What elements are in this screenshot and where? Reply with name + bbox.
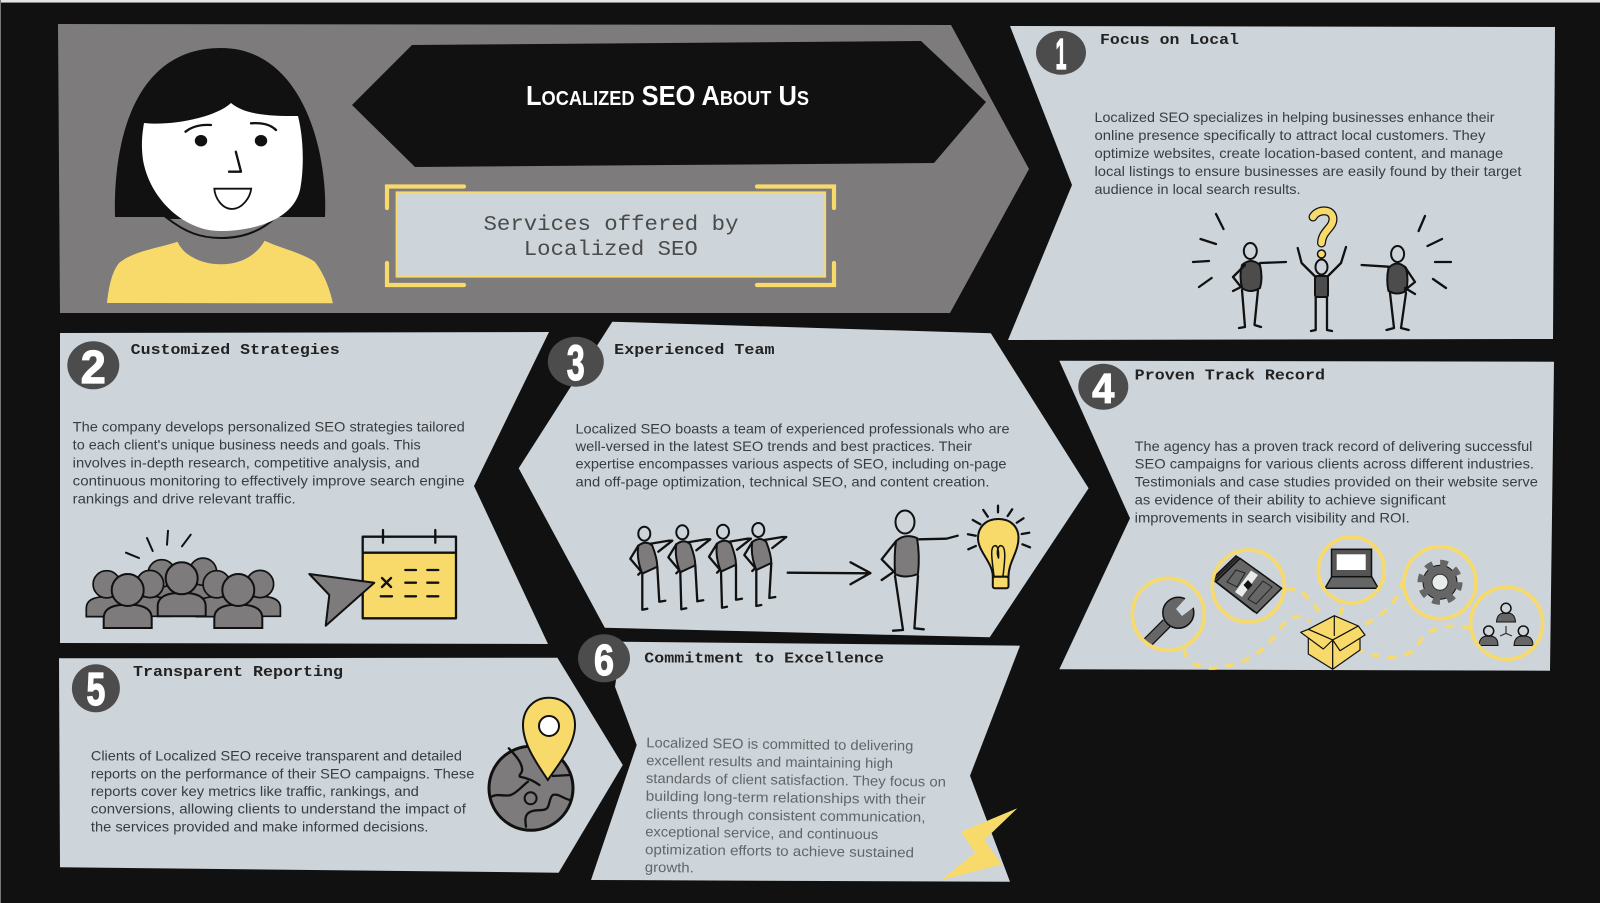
badge 5: 5 <box>86 663 105 715</box>
icon: wrench <box>1132 578 1204 650</box>
subtitle text: Localized SEO <box>524 239 698 262</box>
heading: Proven Track Record <box>1135 367 1325 384</box>
body text: online presence specifically to attract local customers. They <box>1094 127 1486 143</box>
icon: money stack <box>1212 550 1284 622</box>
body text: Localized SEO is committed to delivering <box>646 734 913 754</box>
panel shape <box>519 322 1089 637</box>
icon: people network <box>1471 587 1543 659</box>
body text: Clients of Localized SEO receive transparent and detailed <box>91 748 462 764</box>
avatar: woman with bob haircut <box>107 48 333 303</box>
body text: to each client's unique business needs and goals. This <box>73 436 421 452</box>
body text: audience in local search results. <box>1094 181 1300 197</box>
badge 1 <box>1036 30 1086 79</box>
body text: and off-page optimization, technical SEO, and content creation. <box>576 473 990 489</box>
panel shape <box>59 658 623 873</box>
body text: improvements in search visibility and ROI. <box>1135 510 1410 526</box>
heading: Experienced Team <box>614 342 774 359</box>
icon: lightning bolt <box>942 808 1017 880</box>
panel 4: Proven Track Record <box>1059 361 1554 671</box>
heading: Transparent Reporting <box>133 664 343 681</box>
badge 3 <box>548 335 604 391</box>
illustration: three figures and question mark <box>1193 211 1451 331</box>
panel 6: Commitment to Excellence <box>578 634 1020 882</box>
heading: Focus on Local <box>1100 32 1239 49</box>
body text: The agency has a proven track record of delivering successful <box>1135 438 1532 454</box>
body text: SEO campaigns for various clients across different industries. <box>1135 456 1534 472</box>
badge 3: 3 <box>567 335 585 391</box>
title banner <box>352 41 986 167</box>
arrow <box>788 562 870 584</box>
illustration: leader pointing <box>882 510 958 631</box>
icon: gear <box>1404 547 1476 619</box>
body text: exceptional service, and continuous <box>645 823 878 842</box>
icon: globe with location pin <box>489 698 575 830</box>
panel shape <box>60 332 549 644</box>
badge 2 <box>67 341 119 393</box>
illustration: four team members <box>630 523 786 610</box>
hero arrow background <box>58 24 1029 313</box>
body text: Testimonials and case studies provided on their website serve <box>1135 473 1538 489</box>
body text: optimize websites, create location-based content, and manage <box>1094 145 1503 161</box>
badge 6: 6 <box>594 636 614 685</box>
body text: as evidence of their ability to achieve significant <box>1135 492 1446 508</box>
body text: rankings and drive relevant traffic. <box>73 490 296 506</box>
panel 3: Experienced Team <box>519 322 1089 637</box>
icon: laptop <box>1318 537 1384 603</box>
body text: building long-term relationships with their <box>646 788 926 807</box>
body text: continuous monitoring to effectively improve search engine <box>73 473 465 489</box>
body text: well-versed in the latest SEO trends and best practices. Their <box>574 438 972 454</box>
panel: hero header <box>58 24 1029 313</box>
subtitle box with corner brackets <box>387 186 834 285</box>
icon: calendar with arrow <box>309 530 456 626</box>
badge 5 <box>72 663 120 715</box>
body text: clients through consistent communication, <box>645 805 926 825</box>
badge 6 <box>578 634 630 685</box>
body text: local listings to ensure businesses are easily found by their target <box>1094 163 1522 179</box>
panel shape <box>1008 26 1555 340</box>
badge 4: 4 <box>1092 365 1115 412</box>
badge 2: 2 <box>81 341 106 393</box>
body text: standards of client satisfaction. They focus on <box>646 770 946 790</box>
body text: involves in-depth research, competitive analysis, and <box>73 455 420 471</box>
panel shape <box>1059 361 1554 671</box>
title: Localized SEO About Us <box>526 80 809 111</box>
illustration: dashed connectors <box>1184 580 1471 668</box>
badge 4 <box>1078 364 1128 412</box>
body text: the services provided and make informed decisions. <box>91 819 428 835</box>
heading: Customized Strategies <box>131 342 340 359</box>
icon: crowd of people <box>86 531 280 628</box>
body text: expertise encompasses various aspects of SEO, including on-page <box>576 456 1007 472</box>
subtitle text: Services offered by <box>484 214 738 237</box>
panel 1: Focus on Local <box>1008 26 1555 340</box>
body text: reports cover key metrics like traffic, rankings, and <box>91 783 419 799</box>
body text: excellent results and maintaining high <box>646 752 893 771</box>
panel 5: Transparent Reporting <box>59 658 623 873</box>
icon: open box <box>1301 616 1365 669</box>
heading: Commitment to Excellence <box>644 651 884 668</box>
badge 1: 1 <box>1056 30 1066 79</box>
body text: conversions, allowing clients to understand the impact of <box>91 801 466 817</box>
body text: Localized SEO boasts a team of experienced professionals who are <box>576 420 1010 436</box>
panel 2: Customized Strategies <box>60 332 549 644</box>
body text: Localized SEO specializes in helping businesses enhance their <box>1094 109 1495 125</box>
body text: reports on the performance of their SEO campaigns. These <box>91 765 475 781</box>
panel shape <box>591 642 1020 882</box>
body text: The company develops personalized SEO strategies tailored <box>73 419 465 435</box>
body text: growth. <box>645 859 694 875</box>
icon: light bulb <box>968 506 1030 588</box>
body text: optimization efforts to achieve sustained <box>645 841 914 860</box>
